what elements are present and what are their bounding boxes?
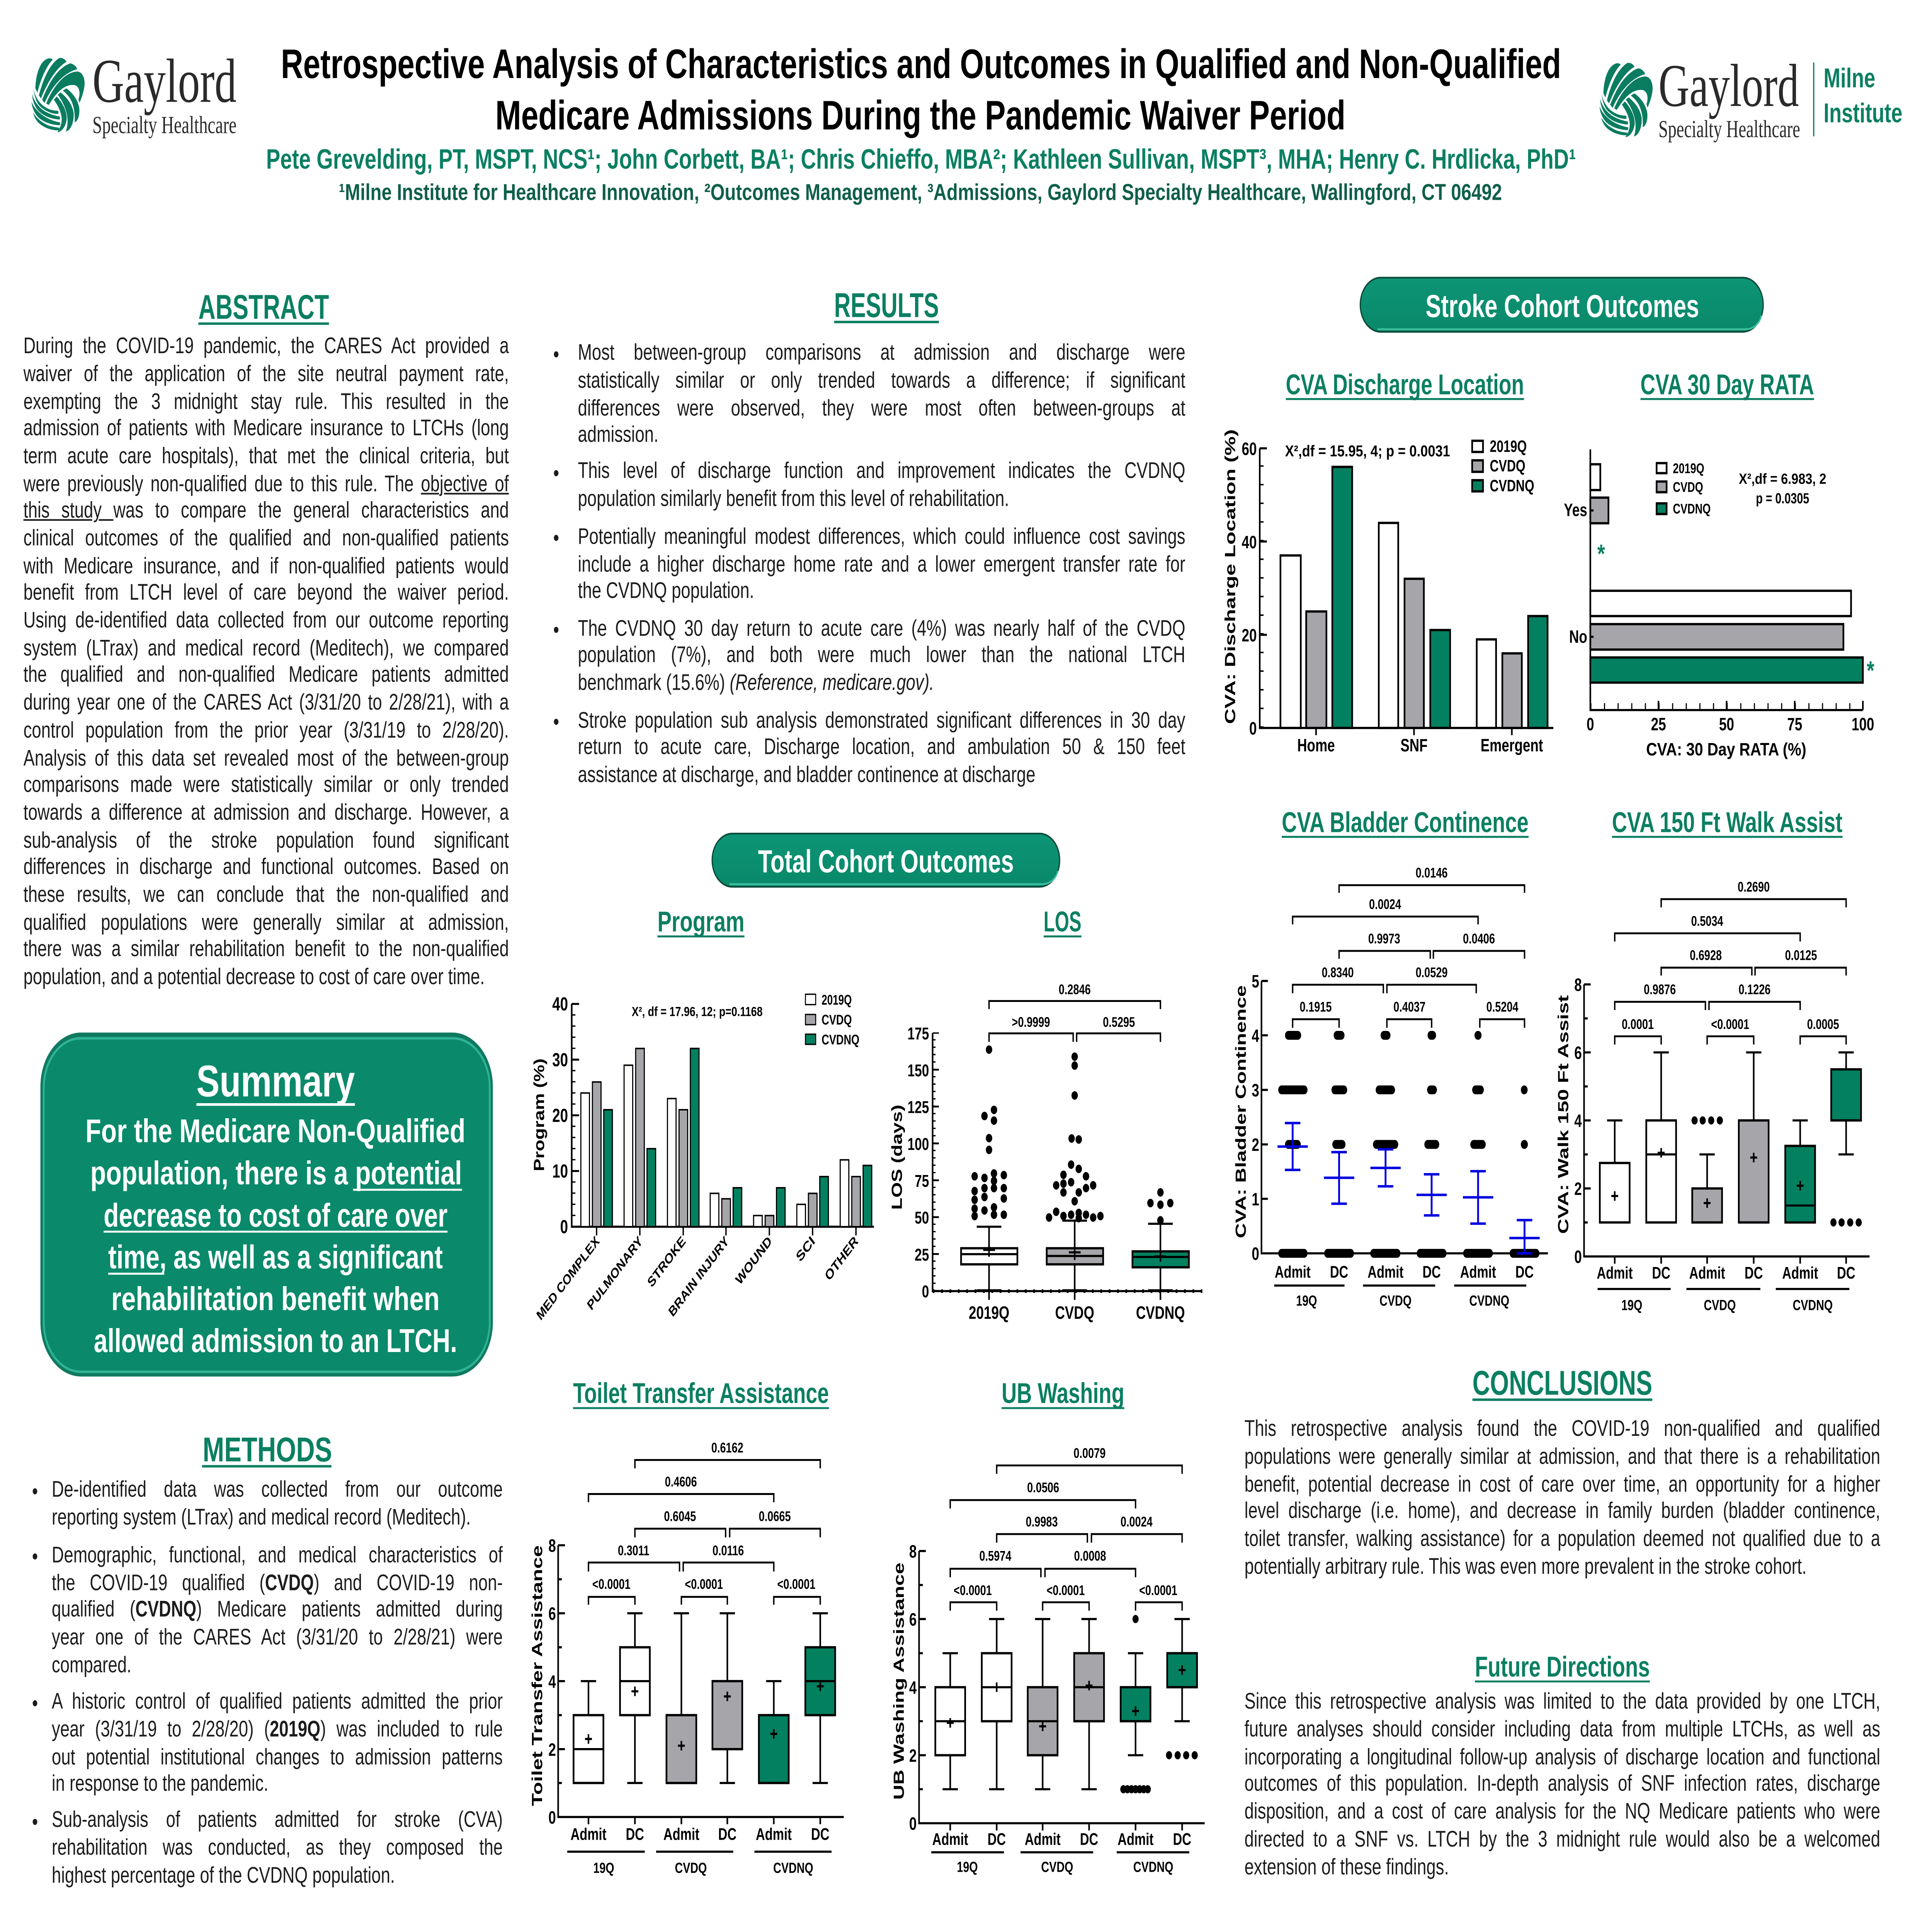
text block: abstract: differences in discharge and functional outcomes. Based on xyxy=(24,855,509,879)
box plot: UB washing: 0.0079 xyxy=(1073,1445,1105,1461)
heading: LOS: LOS xyxy=(1044,905,1082,938)
heading: conclusions: CONCLUSIONS xyxy=(1473,1364,1652,1402)
box plot: CVA 150 ft walk assist: 2 xyxy=(1574,1179,1582,1199)
text block: methods: in response to the pandemic. xyxy=(52,1771,268,1796)
bar chart: program: OTHER xyxy=(823,1233,861,1284)
box plot: UB washing: UB Washing Assistance xyxy=(890,1563,907,1800)
box plot: UB washing: 0.0024 xyxy=(1121,1514,1153,1530)
bar chart: CVA discharge location: 0 xyxy=(1249,718,1257,738)
box plot: CVA 150 ft walk assist: Admit xyxy=(1597,1264,1633,1282)
box plot: LOS: CVDQ xyxy=(1055,1303,1094,1323)
box plot: UB washing: <0.0001 xyxy=(1139,1582,1177,1598)
panel: summary callout: Summary xyxy=(196,1056,355,1106)
text block: methods: year (3/31/19 to 2/28/20) (2019Q) was included to rule xyxy=(52,1716,503,1741)
dot plot: CVA bladder continence: DC xyxy=(1515,1263,1534,1282)
authors: Pete Grevelding, PT, MSPT, NCS¹; John Corbett, BA¹; Chris Chieffo, MBA²; Kathleen Sullivan, MSPT³, MHA; Henry C. Hrdlicka, PhD¹ xyxy=(266,143,1576,175)
text block: results: admission. xyxy=(578,423,658,447)
heading pill: total cohort outcomes xyxy=(712,833,1060,887)
box plot: UB washing: 2 xyxy=(909,1746,917,1766)
heading: results: RESULTS xyxy=(834,286,939,325)
box plot: UB washing: 6 xyxy=(909,1609,917,1629)
bar chart: CVA 30 day RATA: No xyxy=(1569,627,1587,647)
text block: results: the CVDNQ population. xyxy=(578,578,754,603)
box plot: toilet transfer: 0.6045 xyxy=(664,1509,696,1524)
text block: methods: reporting system (LTrax) and medical record (Meditech). xyxy=(52,1505,471,1529)
text block: future directions: extension of these findings. xyxy=(1245,1854,1449,1879)
box plot: LOS: 150 xyxy=(907,1061,929,1080)
heading pill: stroke cohort outcomes xyxy=(1360,278,1763,332)
box plot: CVA 150 ft walk assist: 19Q xyxy=(1621,1297,1642,1314)
text block: methods: year one of the CARES Act (3/31/20 to 2/28/21) were xyxy=(52,1625,503,1649)
text block: conclusions: populations were generally similar at admission, and that there is a rehabilitation xyxy=(1245,1444,1880,1469)
text block: abstract: Analysis of this data set revealed most of the between-group xyxy=(24,745,509,770)
bar chart: CVA 30 day RATA: 0 xyxy=(1587,714,1594,734)
text block: abstract: were previously non-qualified due to this rule. The objective of xyxy=(24,471,509,495)
text block: abstract xyxy=(24,334,509,999)
box plot: toilet transfer: <0.0001 xyxy=(685,1576,723,1592)
box plot: CVA 150 ft walk assist: CVA: Walk 150 Ft Assist xyxy=(1555,995,1571,1234)
bar chart: CVA 30 day RATA: X²,df = 6.983, 2 xyxy=(1739,471,1826,487)
bar chart: CVA discharge location: 2019Q xyxy=(1490,437,1527,456)
text block: abstract: clinical outcomes of the qualified and non-qualified patients xyxy=(24,526,509,550)
dot plot: CVA bladder continence: DC xyxy=(1330,1263,1348,1282)
box plot: CVA 150 ft walk assist: 0.0005 xyxy=(1807,1016,1839,1032)
dot plot: CVA bladder continence: 5 xyxy=(1252,971,1259,992)
heading: CVA bladder continence: CVA Bladder Continence xyxy=(1282,806,1529,838)
bar chart: CVA 30 day RATA: CVDNQ xyxy=(1673,501,1711,517)
bar chart: program: 2019Q xyxy=(821,992,852,1008)
box plot: CVA 150 ft walk assist: 0.0001 xyxy=(1622,1016,1654,1032)
title xyxy=(281,41,1561,138)
heading: CVA 150 ft walk assist: CVA 150 Ft Walk Assist xyxy=(1612,806,1842,838)
text block: results: • xyxy=(553,341,559,367)
text block: methods: A historic control of qualified patients admitted the prior xyxy=(52,1689,503,1714)
box plot: toilet transfer: 8 xyxy=(548,1536,556,1556)
bar chart: CVA discharge location: Home xyxy=(1297,735,1335,755)
text block: results: Most between-group comparisons at admission and discharge were xyxy=(578,340,1185,365)
box plot: CVA 150 ft walk assist: <0.0001 xyxy=(1711,1016,1749,1032)
box plot: UB washing: DC xyxy=(1080,1830,1098,1849)
bar chart: CVA discharge location: 60 xyxy=(1242,439,1257,459)
text block: future directions: incorporating a longitudinal follow-up analysis of discharge location and functional xyxy=(1245,1744,1880,1769)
affiliations: ¹Milne Institute for Healthcare Innovation, ²Outcomes Management, ³Admissions, Gaylord Specialty Healthcare, Wallingford, CT 06492 xyxy=(339,179,1502,205)
dot plot: CVA bladder continence: Admit xyxy=(1460,1263,1496,1282)
box plot: CVA 150 ft walk assist: DC xyxy=(1837,1264,1855,1282)
text block: abstract: qualified populations were generally similar at admission, xyxy=(24,910,509,934)
text block: abstract: there was a similar rehabilitation benefit to the non-qualified xyxy=(24,937,509,962)
box plot: toilet transfer: Admit xyxy=(663,1825,699,1844)
dot plot: CVA bladder continence: CVDNQ xyxy=(1469,1293,1509,1309)
text block: future directions: disposition, and a cost of care analysis for the NQ Medicare patients who were xyxy=(1245,1799,1880,1824)
logo: Gaylord Milne Institute right: Gaylord xyxy=(1658,52,1799,119)
bar chart: CVA discharge location: CVDQ xyxy=(1490,457,1526,475)
box plot: LOS: LOS (days) xyxy=(888,1105,905,1210)
box plot: CVA 150 ft walk assist: DC xyxy=(1745,1264,1763,1282)
bar chart: program: 20 xyxy=(552,1105,568,1126)
logo: Gaylord left: Specialty Healthcare xyxy=(92,112,236,139)
text block: methods: • xyxy=(32,1478,38,1503)
text block: abstract: waiver of the application of the site neutral payment rate, xyxy=(24,361,509,386)
bar chart: program: WOUND xyxy=(733,1233,774,1288)
panel: summary callout: time, as well as a significant xyxy=(108,1238,443,1275)
box plot: CVA 150 ft walk assist: 0.5034 xyxy=(1691,913,1723,929)
bar chart: CVA discharge location: Emergent xyxy=(1481,735,1543,755)
text block: results: • xyxy=(553,709,559,734)
bar chart: CVA 30 day RATA: 100 xyxy=(1852,714,1874,734)
text block: abstract: benefit from LTCH level of care beyond the waiver period. xyxy=(24,580,509,605)
bar chart: CVA 30 day RATA: Yes xyxy=(1564,500,1587,520)
bar chart: program: 40 xyxy=(552,994,568,1015)
text block: abstract: with Medicare insurance, and if non-qualified patients would xyxy=(24,553,509,578)
panel: summary callout: allowed admission to an LTCH. xyxy=(94,1322,457,1359)
bar chart: CVA 30 day RATA: CVA: 30 Day RATA (%) xyxy=(1646,739,1806,759)
box plot: LOS: >0.9999 xyxy=(1012,1014,1050,1030)
box plot: CVA 150 ft walk assist xyxy=(1555,879,1869,1314)
box plot: toilet transfer: DC xyxy=(811,1825,829,1844)
heading pill: total cohort outcomes: Total Cohort Outcomes xyxy=(758,844,1014,879)
box plot: toilet transfer: <0.0001 xyxy=(777,1576,815,1592)
box plot: LOS: 175 xyxy=(907,1024,929,1043)
bar chart: CVA 30 day RATA: * xyxy=(1867,656,1874,685)
box plot: toilet transfer: <0.0001 xyxy=(592,1576,631,1592)
bar chart: CVA 30 day RATA: CVDQ xyxy=(1673,479,1703,495)
text block: results: population (7%), and both were much lower than the national LTCH xyxy=(578,643,1185,668)
box plot: CVA 150 ft walk assist: CVDQ xyxy=(1704,1297,1736,1314)
box plot: CVA 150 ft walk assist: 4 xyxy=(1574,1111,1582,1131)
bar chart: CVA 30 day RATA: 75 xyxy=(1787,714,1802,734)
text block: conclusions: This retrospective analysis found the COVID-19 non-qualified and qualified xyxy=(1245,1417,1880,1441)
box plot: UB washing: CVDQ xyxy=(1041,1859,1073,1875)
box plot: toilet transfer: 2 xyxy=(548,1740,556,1760)
title: Medicare Admissions During the Pandemic Waiver Period xyxy=(495,92,1345,138)
text block: results: include a higher discharge home rate and a lower emergent transfer rate for xyxy=(578,551,1185,576)
box plot: UB washing: 0.0506 xyxy=(1027,1480,1059,1495)
box plot: UB washing: Admit xyxy=(1117,1830,1153,1849)
text block: methods: De-identified data was collected from our outcome xyxy=(52,1477,503,1502)
box plot: UB washing: 19Q xyxy=(957,1859,978,1875)
bar chart: program: CVDNQ xyxy=(821,1032,859,1048)
box plot: toilet transfer: 0 xyxy=(548,1808,556,1828)
text block: results: differences were observed, they were most often between-groups at xyxy=(578,395,1185,420)
panel: summary callout: For the Medicare Non-Qualified xyxy=(85,1112,465,1149)
text block: results: benchmark (15.6%) (Reference, medicare.gov). xyxy=(578,670,934,695)
box plot: LOS: 100 xyxy=(907,1135,929,1154)
text block: abstract: control population from the prior year (3/31/19 to 2/28/20). xyxy=(24,718,509,742)
bar chart: CVA 30 day RATA: p = 0.0305 xyxy=(1756,490,1809,507)
bar chart: CVA 30 day RATA: 2019Q xyxy=(1673,461,1704,476)
panel: summary callout: decrease to cost of care over xyxy=(104,1197,447,1233)
text block: results: Potentially meaningful modest differences, which could influence cost savings xyxy=(578,524,1185,548)
box plot: UB washing: <0.0001 xyxy=(1047,1582,1085,1598)
box plot: UB washing: 4 xyxy=(909,1678,917,1698)
text block: results: Stroke population sub analysis demonstrated significant differences in 30 day xyxy=(578,707,1185,732)
bar chart: program: BRAIN INJURY xyxy=(666,1233,731,1320)
bar chart: CVA discharge location xyxy=(1222,429,1553,755)
box plot: UB washing: 8 xyxy=(909,1541,917,1561)
text block: results: return to acute care, Discharge location, and ambulation 50 & 150 feet xyxy=(578,735,1185,760)
bar chart: program: 30 xyxy=(552,1049,568,1071)
dot plot: CVA bladder continence: 0.0024 xyxy=(1369,896,1401,912)
text block: results xyxy=(553,340,1185,800)
box plot: LOS: 125 xyxy=(907,1098,929,1117)
box plot: UB washing: Admit xyxy=(1025,1830,1061,1849)
dot plot: CVA bladder continence: 0.9973 xyxy=(1368,931,1400,946)
box plot: toilet transfer xyxy=(529,1440,844,1876)
bar chart: program: 0 xyxy=(560,1217,568,1238)
box plot: CVA 150 ft walk assist: Admit xyxy=(1782,1264,1818,1282)
dot plot: CVA bladder continence: 0 xyxy=(1252,1244,1259,1264)
box plot: CVA 150 ft walk assist: DC xyxy=(1652,1264,1670,1282)
text block: abstract: population, and a potential decrease to cost of care over time. xyxy=(24,964,485,989)
text block: abstract: the qualified and non-qualified Medicare patients admitted xyxy=(24,663,509,687)
dot plot: CVA bladder continence: 3 xyxy=(1252,1080,1259,1100)
heading: methods: METHODS xyxy=(203,1430,332,1469)
dot plot: CVA bladder continence: 2 xyxy=(1252,1135,1259,1155)
box plot: toilet transfer: CVDNQ xyxy=(773,1860,813,1876)
text block: methods: the COVID-19 qualified (CVDQ) and COVID-19 non- xyxy=(52,1570,503,1594)
text block: abstract: towards a difference at admission and discharge. However, a xyxy=(24,800,509,825)
logo: Gaylord Milne Institute right xyxy=(1600,52,1902,143)
box plot: LOS: 50 xyxy=(915,1208,929,1228)
text block: abstract: Using de-identified data collected from our outcome reporting xyxy=(24,608,509,633)
box plot: toilet transfer: 6 xyxy=(548,1604,556,1624)
bar chart: program: Program (%) xyxy=(531,1058,547,1171)
box plot: CVA 150 ft walk assist: 0.6928 xyxy=(1690,947,1722,963)
text block: abstract: exempting the 3 midnight stay rule. This resulted in the xyxy=(24,389,509,413)
box plot: toilet transfer: 0.0665 xyxy=(759,1509,791,1524)
text block: results: The CVDNQ 30 day return to acute care (4%) was nearly half of the CVDQ xyxy=(578,616,1185,640)
box plot: UB washing: 0.5974 xyxy=(979,1548,1012,1564)
text block: methods: Demographic, functional, and medical characteristics of xyxy=(52,1543,503,1567)
text block: conclusions: level discharge (i.e. home), and decrease in family burden (bladder continence, xyxy=(1245,1499,1880,1524)
text block: conclusions: benefit, potential decrease in cost of care over time, an opportunity for a higher xyxy=(1245,1472,1880,1496)
box plot: UB washing: DC xyxy=(988,1830,1006,1849)
heading pill: stroke cohort outcomes: Stroke Cohort Outcomes xyxy=(1425,288,1699,324)
bar chart: program: X², df = 17.96, 12; p=0.1168 xyxy=(632,1005,763,1019)
dot plot: CVA bladder continence: DC xyxy=(1422,1263,1441,1282)
bar chart: program: SCI xyxy=(794,1233,817,1265)
box plot: toilet transfer: 0.3011 xyxy=(618,1543,649,1558)
text block: results: statistically similar or only trended towards a difference; if significant xyxy=(578,368,1185,393)
box plot: CVA 150 ft walk assist: 0.1226 xyxy=(1738,981,1770,997)
dot plot: CVA bladder continence: 0.8340 xyxy=(1322,964,1354,980)
text block: results: • xyxy=(553,460,559,485)
text block: methods xyxy=(32,1477,503,1901)
text block: future directions: outcomes of this population. In-depth analysis of SNF infection rates, discharge xyxy=(1245,1772,1880,1796)
dot plot: CVA bladder continence: 4 xyxy=(1252,1026,1259,1046)
box plot: toilet transfer: 4 xyxy=(548,1672,556,1692)
text block: results: • xyxy=(553,617,559,642)
box plot: UB washing: <0.0001 xyxy=(954,1582,992,1598)
box plot: toilet transfer: Toilet Transfer Assistance xyxy=(529,1545,546,1806)
bar chart: CVA discharge location: CVDNQ xyxy=(1490,476,1534,495)
box plot: UB washing xyxy=(890,1445,1205,1875)
dot plot: CVA bladder continence: 19Q xyxy=(1296,1293,1317,1309)
text block: abstract: During the COVID-19 pandemic, the CARES Act provided a xyxy=(24,334,509,359)
bar chart: program: STROKE xyxy=(645,1233,688,1290)
box plot: UB washing: 0.9983 xyxy=(1026,1514,1058,1530)
box plot: UB washing: 0 xyxy=(909,1814,917,1834)
box plot: CVA 150 ft walk assist: 8 xyxy=(1574,975,1582,995)
bar chart: program: 10 xyxy=(552,1161,568,1182)
box plot: CVA 150 ft walk assist: CVDNQ xyxy=(1793,1297,1833,1314)
dot plot: CVA bladder continence: 0.5204 xyxy=(1486,999,1519,1015)
panel: summary callout: population, there is a potential xyxy=(90,1155,462,1191)
text block: abstract: term acute care hospitals), that met the clinical criteria, but xyxy=(24,444,509,468)
dot plot: CVA bladder continence: CVDQ xyxy=(1379,1293,1412,1309)
box plot: CVA 150 ft walk assist: 6 xyxy=(1574,1043,1582,1063)
box plot: CVA 150 ft walk assist: Admit xyxy=(1689,1264,1725,1282)
text block: abstract: these results, we can conclude that the non-qualified and xyxy=(24,882,509,907)
heading: CVA 30 day RATA: CVA 30 Day RATA xyxy=(1640,368,1814,400)
text block: results: assistance at discharge, and bladder continence at discharge xyxy=(578,762,1036,787)
box plot: CVA 150 ft walk assist: 0 xyxy=(1574,1247,1582,1267)
box plot: UB washing: 0.0008 xyxy=(1074,1548,1106,1564)
box plot: CVA 150 ft walk assist: 0.9876 xyxy=(1644,981,1676,997)
box plot: toilet transfer: 19Q xyxy=(593,1860,614,1876)
dot plot: CVA bladder continence: Admit xyxy=(1275,1263,1311,1282)
heading: CVA discharge location: CVA Discharge Location xyxy=(1286,368,1524,400)
box plot: toilet transfer: Admit xyxy=(570,1825,607,1844)
box plot: LOS: CVDNQ xyxy=(1136,1303,1185,1323)
heading: UB washing: UB Washing xyxy=(1002,1377,1124,1409)
box plot: toilet transfer: DC xyxy=(626,1825,644,1844)
heading: abstract: ABSTRACT xyxy=(198,288,329,326)
logo: Gaylord left xyxy=(32,46,236,139)
dot plot: CVA bladder continence: Admit xyxy=(1367,1263,1403,1282)
text block: abstract: system (LTrax) and medical record (Meditech), we compared xyxy=(24,635,509,660)
text block: conclusions xyxy=(1245,1417,1880,1589)
dot plot: CVA bladder continence: CVA: Bladder Continence xyxy=(1232,985,1249,1238)
bar chart: CVA 30 day RATA: 50 xyxy=(1719,714,1734,734)
text block: methods: out potential institutional changes to admission patterns xyxy=(52,1744,503,1769)
logo: Gaylord left: Gaylord xyxy=(92,46,236,116)
bar chart: CVA discharge location: X²,df = 15.95, 4; p = 0.0031 xyxy=(1285,442,1450,460)
bar chart: CVA 30 day RATA: * xyxy=(1597,539,1605,568)
text block: methods: highest percentage of the CVDNQ population. xyxy=(52,1863,395,1887)
dot plot: CVA bladder continence: 0.1915 xyxy=(1300,999,1332,1015)
text block: methods: • xyxy=(32,1809,38,1834)
bar chart: CVA discharge location: SNF xyxy=(1400,735,1428,755)
text block: abstract: admission of patients with Medicare insurance to LTCHs (long xyxy=(24,416,509,441)
bar chart: program: PULMONARY xyxy=(585,1233,645,1313)
title: Retrospective Analysis of Characteristics and Outcomes in Qualified and Non-Qualified xyxy=(281,41,1561,87)
box plot: LOS: 75 xyxy=(915,1172,929,1191)
box plot: LOS: 0.2846 xyxy=(1059,981,1091,997)
text block: methods: • xyxy=(32,1690,38,1716)
bar chart: CVA discharge location: 20 xyxy=(1242,625,1257,645)
text block: future directions: future analyses should consider including data from multiple LTCHs, as well as xyxy=(1245,1717,1880,1742)
text block: abstract: sub-analysis of the stroke population found significant xyxy=(24,827,509,852)
text block: methods: qualified (CVDNQ) Medicare patients admitted during xyxy=(52,1597,503,1622)
text block: future directions xyxy=(1245,1689,1880,1890)
panel: summary callout: rehabilitation benefit when xyxy=(111,1281,440,1317)
dot plot: CVA bladder continence xyxy=(1232,865,1548,1309)
dot plot: CVA bladder continence: 0.0406 xyxy=(1463,931,1495,946)
box plot: toilet transfer: CVDQ xyxy=(675,1860,707,1876)
dot plot: CVA bladder continence: 0.0529 xyxy=(1416,964,1447,980)
text block: results: • xyxy=(553,525,559,550)
logo: Gaylord Milne Institute right: Milne xyxy=(1823,63,1875,94)
text block: results: This level of discharge function and improvement indicates the CVDNQ xyxy=(578,459,1185,484)
box plot: toilet transfer: 0.0116 xyxy=(713,1543,744,1558)
panel: summary callout xyxy=(41,1032,493,1376)
heading: program: Program xyxy=(658,905,745,938)
box plot: toilet transfer: 0.4606 xyxy=(665,1474,697,1490)
box plot: toilet transfer: Admit xyxy=(756,1825,792,1844)
dot plot: CVA bladder continence: 0.0146 xyxy=(1416,865,1447,881)
text block: results: population similarly benefit from this level of rehabilitation. xyxy=(578,486,1009,511)
box plot: UB washing: CVDNQ xyxy=(1133,1859,1173,1875)
text block: conclusions: toilet transfer, walking assistance) for a population deemed not qualified due to a xyxy=(1245,1526,1880,1551)
box plot: LOS: 25 xyxy=(915,1245,929,1265)
box plot: CVA 150 ft walk assist: 0.2690 xyxy=(1738,879,1770,895)
dot plot: CVA bladder continence: 0.4037 xyxy=(1393,999,1425,1015)
dot plot: CVA bladder continence: 1 xyxy=(1252,1189,1259,1209)
text block: methods: compared. xyxy=(52,1652,131,1677)
box plot: LOS: 0 xyxy=(922,1282,929,1301)
bar chart: CVA 30 day RATA: 25 xyxy=(1651,714,1666,734)
text block: methods: • xyxy=(32,1543,38,1569)
text block: conclusions: potentially arbitrary rule. This was even more prevalent in the stroke cohort. xyxy=(1245,1554,1806,1578)
bar chart: CVA 30 day RATA xyxy=(1564,449,1874,759)
box plot: toilet transfer: 0.6162 xyxy=(711,1440,743,1456)
bar chart: CVA discharge location: 40 xyxy=(1242,532,1257,552)
text block: future directions: Since this retrospective analysis was limited to the data provided by one LTCH, xyxy=(1245,1689,1880,1714)
box plot: UB washing: DC xyxy=(1173,1830,1191,1849)
bar chart: program xyxy=(531,992,874,1323)
heading: future directions: Future Directions xyxy=(1475,1650,1650,1683)
text block: methods: rehabilitation was conducted, as they composed the xyxy=(52,1835,503,1860)
text block: abstract: comparisons made were statistically similar or only trended xyxy=(24,772,509,797)
text block: abstract: during year one of the CARES Act (3/31/20 to 2/28/21), with a xyxy=(24,690,509,715)
box plot: CVA 150 ft walk assist: 0.0125 xyxy=(1785,947,1817,963)
box plot: LOS xyxy=(888,981,1202,1323)
box plot: toilet transfer: DC xyxy=(718,1825,736,1844)
bar chart: CVA discharge location: CVA: Discharge Location (%) xyxy=(1222,429,1238,724)
logo: Gaylord Milne Institute right: Institute xyxy=(1823,99,1902,129)
text block: abstract: this study was to compare the general characteristics and xyxy=(24,498,509,523)
box plot: LOS: 2019Q xyxy=(969,1303,1009,1323)
heading: toilet transfer assistance: Toilet Transfer Assistance xyxy=(573,1377,829,1409)
text block: methods: Sub-analysis of patients admitted for stroke (CVA) xyxy=(52,1808,503,1833)
text block: future directions: directed to a SNF vs. LTCH by the 3 midnight rule would also be a welcomed xyxy=(1245,1827,1880,1851)
box plot: LOS: 0.5295 xyxy=(1103,1014,1135,1030)
bar chart: program: MED COMPLEX xyxy=(534,1233,602,1323)
box plot: UB washing: Admit xyxy=(932,1830,968,1849)
logo: Gaylord Milne Institute right: Specialty Healthcare xyxy=(1658,116,1800,143)
bar chart: program: CVDQ xyxy=(821,1012,852,1027)
